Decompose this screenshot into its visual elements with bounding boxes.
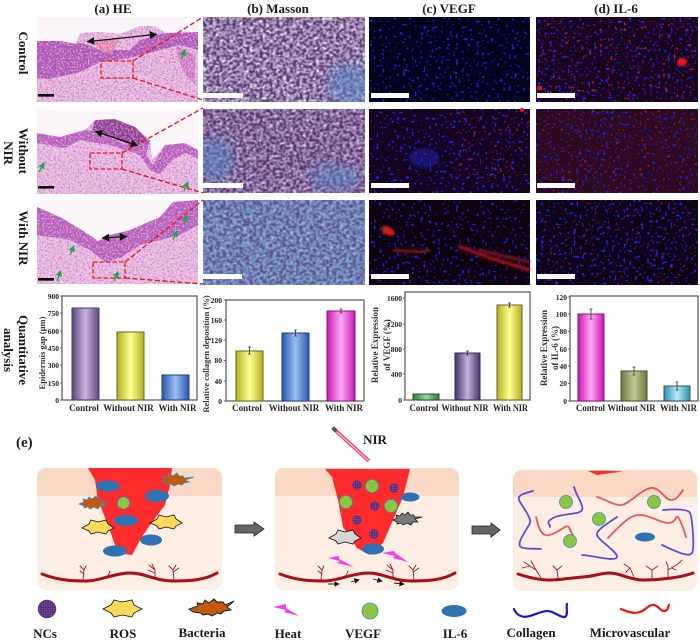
chart: IL-6 expression: 20 bbox=[560, 379, 567, 388]
legend: NCs: NCs bbox=[33, 626, 57, 641]
row label: Quantitative analysis bbox=[1, 315, 31, 385]
chart: IL-6 expression bbox=[539, 293, 698, 413]
chart: VEGF expression: Without NIR bbox=[442, 403, 489, 413]
legend: Heat bbox=[273, 604, 302, 641]
chart: IL-6 expression: 40 bbox=[560, 362, 567, 371]
chart: VEGF expression: 400 bbox=[391, 370, 402, 379]
chart: IL-6 expression: 0 bbox=[563, 397, 567, 406]
ros stars bbox=[82, 515, 182, 534]
collagen fibres bbox=[519, 487, 693, 559]
legend: ROS bbox=[103, 600, 142, 641]
chart: IL-6 expression: 120 bbox=[556, 293, 567, 302]
label: (e): (e) bbox=[16, 435, 33, 451]
heading: (c) VEGF: (c) VEGF bbox=[422, 1, 476, 16]
chart: IL-6 expression: Without NIR bbox=[608, 403, 656, 413]
chart: collagen deposition: With NIR bbox=[325, 403, 364, 413]
chart: epidermis gap: 600 bbox=[48, 327, 59, 336]
chart: VEGF expression: 1200 bbox=[387, 320, 402, 329]
panel: wound before treatment bbox=[37, 468, 222, 590]
il-6 bbox=[362, 492, 420, 554]
chart: epidermis gap: Control bbox=[69, 403, 99, 413]
chart: VEGF expression: 800 bbox=[391, 345, 402, 354]
legend: IL-6 bbox=[442, 605, 468, 641]
chart: IL-6 expression: 60 bbox=[560, 345, 567, 354]
green arrows bbox=[39, 52, 187, 281]
legend: Heat: Heat bbox=[275, 626, 302, 641]
chart: collagen deposition: Relative collagen deposition (%) bbox=[201, 295, 211, 413]
heat bbox=[328, 551, 408, 567]
vessel bbox=[518, 560, 693, 580]
chart: IL-6 expression: Control bbox=[576, 403, 605, 413]
legend: Bacteria bbox=[179, 599, 234, 640]
chart: epidermis gap: 450 bbox=[48, 344, 59, 353]
nanocrystals bbox=[352, 480, 398, 538]
heading: (d) IL-6: (d) IL-6 bbox=[594, 1, 638, 16]
legend: IL-6: IL-6 bbox=[443, 626, 468, 641]
row label: Without NIR: NIR bbox=[1, 141, 16, 166]
zoom lines and boxes bbox=[90, 17, 203, 284]
panel: healed wound bbox=[513, 470, 697, 591]
chart: IL-6 expression: 80 bbox=[560, 327, 567, 336]
chart: collagen deposition: 120 bbox=[211, 336, 222, 345]
chart: epidermis gap: Epidermis gap (µm) bbox=[37, 316, 47, 389]
arrow: step one bbox=[235, 522, 264, 536]
panel: HE without NIR bbox=[37, 109, 198, 194]
panel: wound with NIR treatment bbox=[275, 468, 459, 590]
chart: IL-6 expression: of IL-6 (%) bbox=[550, 326, 560, 370]
chart: collagen deposition: 80 bbox=[214, 356, 222, 365]
heading: (a) HE: (a) HE bbox=[94, 1, 132, 16]
chart: VEGF expression: Control bbox=[410, 403, 439, 413]
chart: collagen deposition: 40 bbox=[214, 377, 222, 386]
bacteria bbox=[79, 473, 194, 509]
panel: HE control bbox=[37, 17, 198, 102]
panel: VEGF without NIR bbox=[369, 108, 530, 193]
panel: VEGF with NIR bbox=[369, 200, 530, 285]
row label: Without NIR: Without bbox=[16, 128, 31, 175]
il-6 bbox=[635, 532, 655, 542]
chart: VEGF expression: 0 bbox=[398, 396, 402, 405]
panel: Masson with NIR bbox=[203, 200, 365, 285]
panel: Masson control bbox=[203, 17, 372, 107]
chart: VEGF expression: Relative Expression bbox=[370, 307, 380, 383]
microvascular fibres bbox=[536, 488, 686, 538]
legend: Microvascular: Microvascular bbox=[590, 625, 671, 640]
row label: Without NIR bbox=[1, 128, 31, 175]
gray ros bbox=[329, 530, 361, 544]
legend: Collagen: Collagen bbox=[506, 625, 556, 640]
chart: IL-6 expression: 100 bbox=[556, 310, 567, 319]
scale bars HE bbox=[38, 94, 54, 281]
panel: IL-6 with NIR bbox=[536, 200, 698, 285]
panel: IL-6 control bbox=[536, 17, 698, 102]
legend: VEGF: VEGF bbox=[345, 626, 381, 641]
row label: With NIR: With NIR bbox=[16, 210, 31, 266]
chart: epidermis gap: 750 bbox=[48, 309, 59, 318]
panel: VEGF control bbox=[369, 17, 530, 102]
chart: VEGF expression bbox=[370, 292, 530, 413]
chart: collagen deposition: Without NIR bbox=[269, 403, 320, 413]
black gap arrows bbox=[89, 34, 155, 238]
chart: collagen deposition: 0 bbox=[218, 397, 222, 406]
chart: VEGF expression: of VEGF (%) bbox=[382, 319, 392, 371]
chart: epidermis gap: Without NIR bbox=[103, 403, 154, 413]
heading: (b) Masson: (b) Masson bbox=[247, 1, 310, 16]
chart: collagen deposition bbox=[201, 295, 364, 413]
legend: ROS: ROS bbox=[110, 626, 136, 641]
vegf bbox=[560, 496, 660, 548]
label: NIR: NIR bbox=[363, 432, 388, 447]
chart: epidermis gap: 900 bbox=[48, 292, 59, 301]
chart: epidermis gap: 0 bbox=[55, 396, 59, 405]
legend: NCs bbox=[33, 600, 57, 641]
chart: epidermis gap: 300 bbox=[48, 361, 59, 370]
gray bacteria bbox=[393, 512, 422, 525]
legend: Bacteria: Bacteria bbox=[179, 625, 226, 640]
chart: collagen deposition: 160 bbox=[211, 316, 222, 325]
row label: Quantitative analysis: analysis bbox=[1, 328, 16, 372]
vessel bbox=[42, 564, 217, 581]
panel: HE with NIR bbox=[37, 200, 198, 284]
chart: collagen deposition: Control bbox=[232, 403, 262, 413]
chart: VEGF expression: 1600 bbox=[387, 294, 402, 303]
legend: Microvascular bbox=[590, 605, 671, 640]
legend: VEGF bbox=[345, 603, 381, 641]
vegf bbox=[118, 497, 130, 509]
icon: NIR laser bbox=[331, 426, 369, 461]
chart: IL-6 expression: Relative Expression bbox=[539, 310, 549, 386]
row label: Quantitative analysis: Quantitative bbox=[16, 315, 31, 385]
chart: epidermis gap: 150 bbox=[48, 379, 59, 388]
chart: VEGF expression: With NIR bbox=[493, 403, 528, 413]
vegf bbox=[340, 480, 398, 512]
chart: epidermis gap bbox=[37, 292, 197, 413]
panel: IL-6 without NIR bbox=[536, 109, 698, 193]
arrow: step two bbox=[472, 523, 500, 537]
chart: epidermis gap: With NIR bbox=[158, 403, 197, 413]
chart: collagen deposition: 200 bbox=[211, 296, 222, 305]
vessel bbox=[280, 564, 455, 581]
panel: Masson without NIR bbox=[197, 109, 365, 193]
row label: Control: Control bbox=[16, 31, 31, 75]
flow arrows bbox=[328, 579, 403, 584]
il-6 cells bbox=[96, 480, 169, 556]
chart: IL-6 expression: With NIR bbox=[660, 403, 697, 413]
legend: Collagen bbox=[506, 604, 567, 640]
